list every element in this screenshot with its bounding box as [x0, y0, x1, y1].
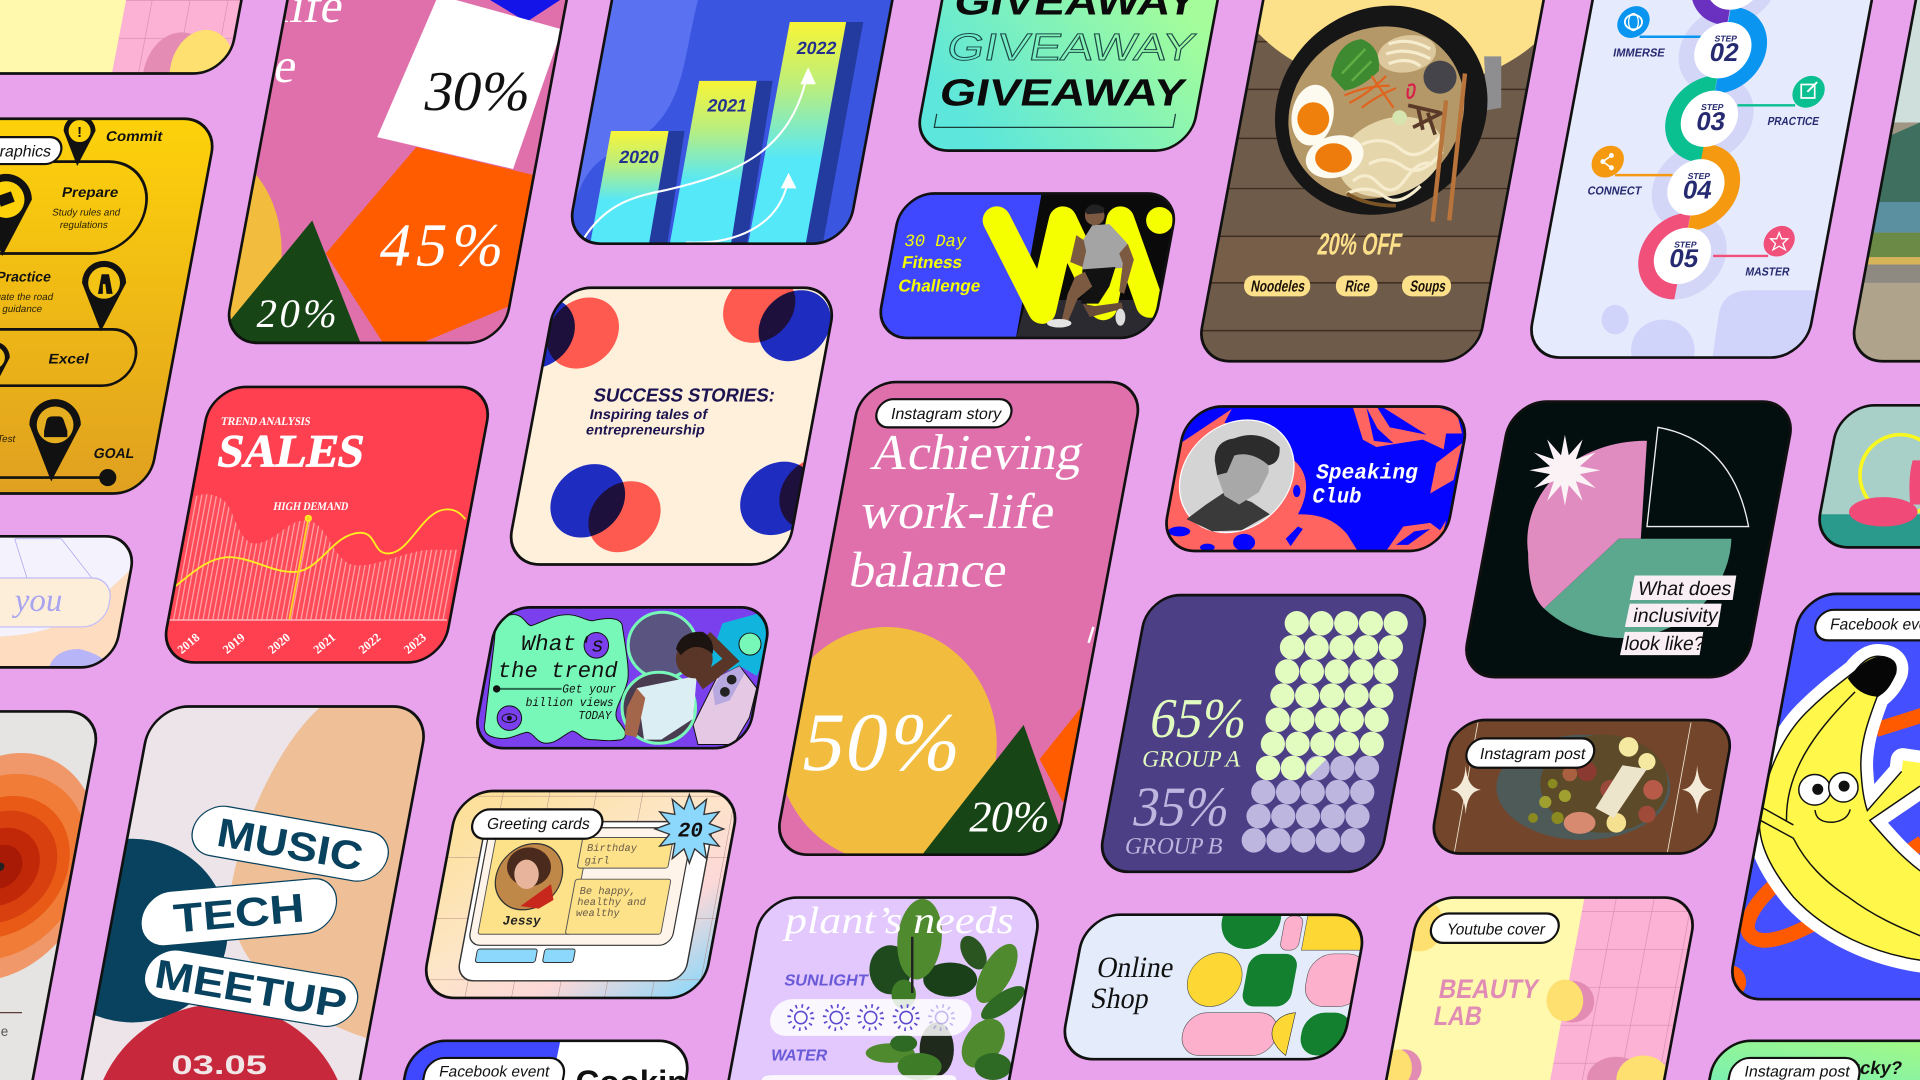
- beauty lab title: LAB: [1432, 1000, 1485, 1031]
- year axis: 2018: [175, 630, 202, 657]
- panel: plant needs: [729, 897, 1043, 1080]
- step labels: [1586, 46, 1820, 278]
- pink grid: [112, 0, 240, 72]
- panel: facebook event cooking: [392, 1038, 708, 1080]
- pin: commit: !: [77, 125, 82, 141]
- panel: orange rings poster: [0, 711, 117, 1080]
- headline bold lower: GIVEAWAY: [936, 72, 1189, 114]
- mint blob: [484, 615, 628, 743]
- green triangle: [228, 220, 362, 348]
- heading small: TREND ANALYSIS: [220, 415, 312, 428]
- peach shape: [230, 707, 435, 1038]
- 50 percent: 50%: [795, 697, 969, 789]
- trend headline: What: [519, 631, 579, 657]
- menu pills: Rice: [1344, 278, 1372, 295]
- wish panel: [565, 879, 671, 934]
- apostrophe s badge: s: [589, 636, 606, 658]
- quarter outline: [1647, 427, 1749, 527]
- tag pill: Greeting cards: [485, 815, 592, 833]
- challenge text: Challenge: [897, 276, 983, 295]
- pin: prepare: [0, 174, 32, 256]
- group a: [1140, 688, 1252, 772]
- step labels: CONNECT: [1586, 185, 1643, 198]
- pill meetup: [137, 944, 365, 1032]
- bar 2021: [670, 81, 773, 244]
- caption lines: inclusivity: [1631, 605, 1720, 627]
- pin: practice: [82, 261, 126, 331]
- tag pill: [1464, 738, 1597, 768]
- shop title: [1088, 952, 1176, 1015]
- icon: immerse: [1615, 6, 1652, 38]
- apostrophe s badge: ': [577, 636, 593, 658]
- yellow circle: [776, 627, 997, 862]
- subtitle: entrepreneurship: [585, 423, 707, 439]
- club title: Club: [1310, 486, 1364, 510]
- trend headline: [495, 631, 620, 684]
- road map labels: Prepare: [60, 185, 120, 201]
- starburst badge: 20: [676, 820, 705, 843]
- chart label: HIGH DEMAND: [273, 500, 350, 513]
- tag pill: Instagram post: [1743, 1063, 1852, 1080]
- trend line: [175, 509, 465, 619]
- yellow cylinders: [1385, 898, 1670, 1080]
- panel: five steps infographic: [1526, 0, 1883, 381]
- banana: [1759, 656, 1920, 961]
- concentric rings: [0, 753, 117, 981]
- starburst badge: [655, 795, 724, 863]
- navy circle: [37, 839, 228, 1022]
- panel: speaking club: [1161, 407, 1471, 553]
- portrait: [1170, 420, 1304, 533]
- panel: group percentage dots: [1097, 595, 1430, 872]
- year axis: 2022: [356, 630, 384, 657]
- woman photo: [622, 612, 740, 743]
- step labels: MASTER: [1744, 266, 1791, 278]
- track outlines: [0, 162, 154, 478]
- caption lines: [1620, 576, 1736, 655]
- you pill: you: [12, 583, 62, 619]
- road map labels: Excel: [47, 352, 90, 368]
- yellow backdrop: [1258, 0, 1542, 74]
- group a: 65%: [1145, 688, 1252, 750]
- sparkles: [1451, 765, 1712, 814]
- year axis: 2020: [265, 630, 293, 657]
- heading: Achieving: [867, 424, 1088, 480]
- trend subtext: billion views: [524, 696, 615, 710]
- icon: connect: [1589, 146, 1627, 178]
- panel: fitness challenge: [879, 192, 1176, 340]
- subtitle: Inspiring tales of: [588, 407, 709, 423]
- you pill: [0, 578, 114, 627]
- menu pills: Soups: [1409, 278, 1448, 295]
- caption lines: look like?: [1623, 633, 1706, 655]
- pie chart: [1527, 441, 1731, 638]
- challenge text: 30 Day: [903, 233, 968, 252]
- panel: success stories: [497, 272, 860, 564]
- wood planks: [1202, 40, 1526, 332]
- menu pills: [1244, 276, 1451, 296]
- panel: online shop: [1059, 890, 1370, 1059]
- road map notes: Study rules and: [51, 208, 121, 218]
- yellow circle: [230, 175, 282, 320]
- panel: ramen discount: [1200, 0, 1545, 363]
- step labels: PRACTICE: [1766, 115, 1820, 128]
- road map notes: regulations: [59, 220, 109, 231]
- trend subtext: Get your: [561, 683, 617, 697]
- year labels: 2021: [706, 96, 749, 115]
- orange shape: [326, 147, 534, 345]
- beauty lab title: BEAUTY: [1436, 973, 1541, 1004]
- phone: [693, 666, 757, 744]
- 45 percent: 45%: [375, 212, 510, 280]
- tag pill: [0, 137, 64, 164]
- tag pill: [470, 809, 605, 839]
- panel: landscape photo: [1837, 0, 1920, 369]
- trend subtext: [524, 683, 617, 723]
- arrows: [583, 70, 814, 243]
- bar 2022: [748, 22, 863, 244]
- birthday panel: girl: [583, 855, 611, 867]
- green triangle: [918, 725, 1071, 860]
- panel: instagram story work-life balance: [774, 382, 1144, 862]
- step numbers: 02: [1707, 39, 1741, 67]
- pill tech: TECH: [172, 884, 306, 942]
- year labels: 2022: [795, 38, 838, 58]
- panel: percentages chart: [228, 0, 568, 344]
- pill meetup: MEETUP: [152, 950, 350, 1027]
- heading: balance: [845, 542, 1012, 597]
- panel: instagram post lucky: [1709, 1041, 1920, 1080]
- headline outline: GIVEAWAY: [944, 26, 1199, 69]
- name label: Jessy: [501, 914, 542, 928]
- tag pill: [874, 399, 1014, 427]
- subtitle: [585, 407, 709, 439]
- heading: [845, 424, 1088, 597]
- step numbers: 03: [1694, 108, 1728, 136]
- year labels: 2020: [618, 147, 661, 167]
- heading fragments: balance: [142, 38, 302, 93]
- group b: GROUP B: [1123, 834, 1226, 859]
- tag pill: Youtube cover: [1445, 920, 1547, 938]
- background blobs: [1602, 290, 1816, 356]
- discount text: 20% OFF: [1315, 227, 1405, 262]
- pill music: [185, 801, 396, 887]
- panel: inclusivity pie: [1461, 402, 1796, 677]
- panel: sales trend chart: [160, 387, 493, 662]
- year labels: [618, 38, 838, 167]
- panel: road map commit: [0, 115, 218, 493]
- geometric tiles: [1179, 890, 1370, 1056]
- club title: Speaking: [1314, 461, 1420, 485]
- starburst: [1529, 435, 1600, 506]
- step numbers: STEP: [1673, 239, 1698, 249]
- shop title: Shop: [1088, 983, 1152, 1015]
- caption lines: What does: [1636, 578, 1733, 600]
- 20 percent: 20%: [965, 792, 1054, 841]
- transition dots: [1256, 756, 1326, 780]
- shop title: Online: [1095, 952, 1176, 984]
- road map labels: GOAL: [92, 446, 136, 462]
- green dots: [1261, 611, 1408, 756]
- pill tech: [134, 876, 344, 948]
- cloth: [1484, 56, 1501, 110]
- orange ring: [1748, 715, 1920, 940]
- title: SUCCESS STORIES:: [592, 386, 777, 407]
- cyan corner: [704, 610, 771, 676]
- tag pill: Instagram story: [889, 405, 1003, 423]
- red semicircle: [103, 1004, 338, 1080]
- heading sales: SALES: [213, 426, 369, 477]
- panel: rising bar chart: [551, 0, 906, 245]
- club title: [1310, 461, 1420, 510]
- card window: [456, 822, 714, 981]
- panel: greeting cards: [416, 784, 747, 1004]
- plant leaves: [866, 897, 1030, 1080]
- road map labels: Commit: [105, 129, 164, 145]
- sunlight rating: [767, 999, 975, 1036]
- yellow W: [997, 207, 1173, 310]
- date: 03.05: [171, 1050, 267, 1080]
- challenge text: [897, 233, 983, 295]
- white square: [377, 0, 562, 169]
- tag pill: Facebook event: [438, 1063, 552, 1080]
- step labels: IMMERSE: [1612, 46, 1666, 59]
- water label: WATER: [769, 1047, 830, 1064]
- panel: giveaway: [914, 0, 1243, 151]
- panel: instagram post food: [1428, 720, 1735, 857]
- sunlight label: SUNLIGHT: [783, 972, 870, 990]
- panel: whats the trend: [472, 607, 773, 748]
- step numbers: STEP: [1714, 34, 1738, 44]
- wish panel: wealthy: [575, 908, 621, 920]
- birthday panel: Birthday: [586, 843, 638, 855]
- group b: 35%: [1128, 776, 1235, 838]
- beauty lab title: [1432, 973, 1541, 1031]
- lucky heading: Lucky?: [1836, 1057, 1904, 1078]
- blue shape: [490, 0, 560, 20]
- trend headline: the trend: [495, 658, 620, 684]
- portrait panel: [478, 838, 589, 934]
- challenge text: Fitness: [900, 252, 964, 272]
- orange triangle: [1040, 704, 1084, 802]
- pill music: MUSIC: [214, 809, 366, 880]
- step rings: [1642, 0, 1776, 290]
- bar 2020: [590, 131, 684, 244]
- heading fragments: [276, 0, 342, 82]
- lavender dots: [1242, 756, 1379, 853]
- step numbers: STEP: [1700, 102, 1725, 112]
- food plate: [1496, 735, 1670, 840]
- connector lines: [1615, 37, 1795, 256]
- wish panel: Be happy,: [578, 886, 637, 898]
- step numbers: 05: [1667, 245, 1701, 273]
- pin: excel: [0, 342, 10, 393]
- road map labels: [0, 129, 164, 462]
- wish panel: healthy and: [576, 897, 647, 909]
- tag pill: [1428, 913, 1561, 943]
- heading: work-life: [856, 483, 1060, 539]
- year axis: [175, 630, 429, 657]
- pink grid: [1550, 898, 1714, 1080]
- panel: youtube cover beauty lab: [1385, 898, 1714, 1080]
- apostrophe s badge: [577, 632, 609, 658]
- panel: music tech meetup: [37, 707, 435, 1080]
- step numbers: 04: [1681, 177, 1715, 204]
- panel: facebook event banana: [1712, 594, 1920, 999]
- tag pill: Instagram post: [1478, 745, 1588, 763]
- ramen bowl: [1275, 6, 1488, 215]
- athlete: [1047, 204, 1134, 328]
- pin: goal car: [29, 399, 81, 481]
- year axis: 2021: [310, 630, 338, 657]
- panel: flamingo photo: [1812, 405, 1920, 551]
- year axis: 2019: [220, 630, 248, 657]
- menu pills: Noodeles: [1249, 278, 1307, 295]
- step numbers: [1670, 36, 1738, 268]
- eye badge: [497, 706, 522, 730]
- blue streaks: [1168, 408, 1430, 551]
- overlapping circles: [497, 272, 860, 552]
- plant heading: plant’s needs: [781, 900, 1014, 942]
- step discs: [1654, 0, 1753, 284]
- icon: practice: [1790, 76, 1827, 108]
- trend subtext: TODAY: [577, 709, 613, 723]
- year axis: 2023: [401, 630, 429, 657]
- step numbers: STEP: [1687, 171, 1711, 181]
- birthday panel: [577, 838, 673, 868]
- area chart: [170, 494, 458, 620]
- coral shapes: [1163, 408, 1462, 553]
- chopsticks: [1433, 73, 1465, 222]
- 30 percent: 30%: [419, 61, 536, 123]
- banana face: [1799, 773, 1858, 822]
- group b: [1123, 776, 1235, 859]
- panel: you card: [0, 536, 137, 673]
- tag pill: [1813, 610, 1920, 640]
- buttons: [475, 949, 576, 962]
- road map notes: [0, 208, 121, 445]
- tag pill: [1729, 1058, 1862, 1080]
- panel: youtube cover (top-left, cropped): [0, 0, 243, 75]
- pin: commit: [64, 115, 96, 166]
- 20 percent: 20%: [253, 291, 341, 336]
- tag pill: [423, 1058, 567, 1080]
- icon: master: [1761, 226, 1797, 257]
- group a: GROUP A: [1140, 747, 1244, 772]
